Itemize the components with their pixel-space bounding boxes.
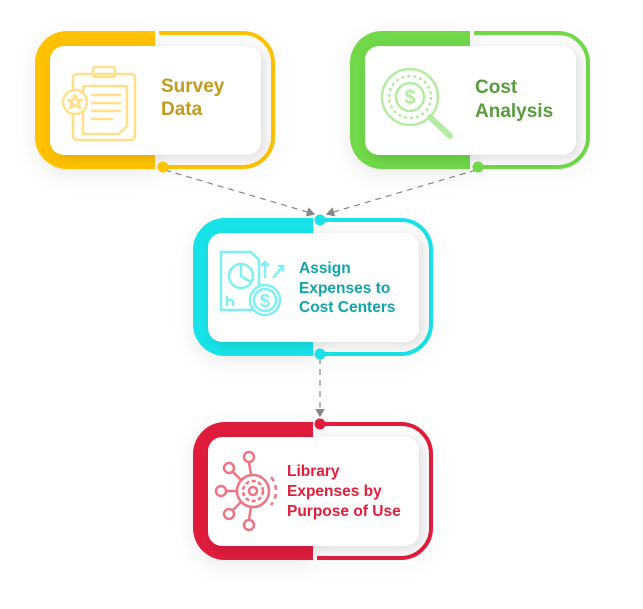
icon: magnifier dollar <box>382 69 450 136</box>
text: Library Expenses by Purpose of Use <box>287 463 401 520</box>
text: Survey Data <box>161 76 225 120</box>
text: Library Expenses by Purpose of Use: Expenses by <box>287 483 382 500</box>
icon: magnifier dollar: $ <box>404 87 416 109</box>
panel: assign expenses <box>193 214 433 360</box>
text: Cost Analysis <box>475 77 553 122</box>
text: Assign Expenses to Cost Centers: Expenses to <box>299 280 390 297</box>
icon: network gear <box>216 452 276 530</box>
text: Survey Data: Survey <box>161 76 225 97</box>
text: Survey Data: Data <box>161 99 203 120</box>
text: Assign Expenses to Cost Centers <box>299 260 395 316</box>
arrow: cost to assign <box>327 170 476 214</box>
icon: report with coin: $ <box>260 291 270 311</box>
icon: report with coin <box>221 252 283 315</box>
panel: cost analysis <box>350 31 590 172</box>
text: Cost Analysis: Analysis <box>475 101 553 122</box>
icon: clipboard <box>63 67 135 140</box>
text: Library Expenses by Purpose of Use: Purpose of Use <box>287 503 401 520</box>
text: Assign Expenses to Cost Centers: Cost Centers <box>299 299 395 316</box>
text: Cost Analysis: Cost <box>475 77 518 98</box>
text: Library Expenses by Purpose of Use: Library <box>287 463 340 480</box>
panel: survey data <box>35 31 275 172</box>
arrow: survey to assign <box>165 170 314 214</box>
text: Assign Expenses to Cost Centers: Assign <box>299 260 351 277</box>
arrow: assign to library <box>319 358 321 416</box>
panel: library expenses <box>193 418 433 560</box>
